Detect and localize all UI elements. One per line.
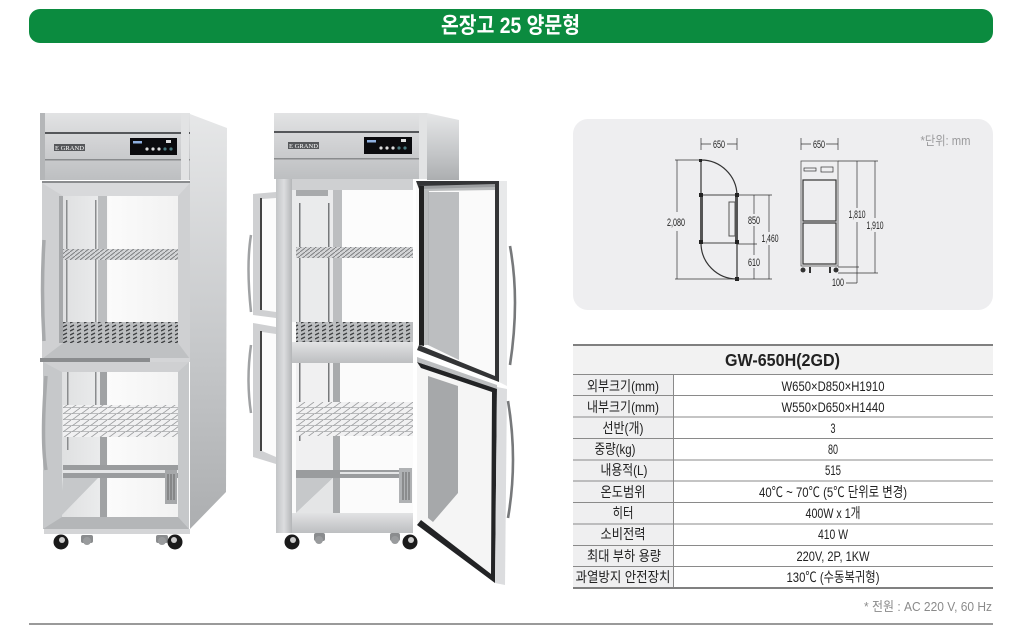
footnote: * 전원 : AC 220 V, 60 Hz xyxy=(864,599,992,614)
upper door xyxy=(42,181,190,359)
row: inner size: 내부크기(mm) xyxy=(587,399,659,415)
row: weight xyxy=(594,441,838,457)
table header xyxy=(573,344,993,374)
row: temperature: 온도범위 xyxy=(600,484,646,500)
left open door lower xyxy=(248,323,276,464)
top control unit: E GRAND xyxy=(55,146,85,152)
spec table xyxy=(573,344,993,589)
title banner xyxy=(29,9,993,43)
top control unit xyxy=(274,113,427,179)
row: power: 410 W xyxy=(818,526,849,542)
row: outer size xyxy=(587,378,885,394)
row: safety device xyxy=(576,569,880,585)
row: weight: 80 xyxy=(828,441,838,457)
top control unit xyxy=(40,113,190,180)
left open door upper xyxy=(248,192,276,318)
side plan drawing: 1,460 xyxy=(762,233,778,245)
row: inner size xyxy=(587,399,885,415)
casters xyxy=(284,533,418,550)
row: weight: 중량(kg) xyxy=(594,441,636,457)
cabinet body xyxy=(276,178,413,533)
unit note: *단위: mm xyxy=(920,134,970,148)
front drawing: 1,910 xyxy=(866,220,884,232)
right open door lower xyxy=(417,357,513,585)
row: heater xyxy=(612,505,860,521)
side plan drawing xyxy=(667,138,778,281)
front drawing xyxy=(800,138,884,289)
front drawing: 1,810 xyxy=(848,209,866,221)
title banner: 온장고 25 양문형 xyxy=(441,13,580,38)
row: outer size: 외부크기(mm) xyxy=(587,378,659,394)
side panel xyxy=(427,113,459,180)
right open door upper xyxy=(416,181,515,386)
row: temperature: 40℃ ~ 70℃ (5℃ 단위로 변경) xyxy=(759,484,907,500)
row: max load: 최대 부하 용량 xyxy=(587,548,661,564)
refrigerator open doors xyxy=(248,113,515,585)
front drawing: 100 xyxy=(832,277,844,289)
row: max load: 220V, 2P, 1KW xyxy=(796,548,870,564)
row: shelves xyxy=(602,420,836,436)
side plan drawing: 610 xyxy=(748,257,760,269)
row: volume xyxy=(600,462,841,478)
row: safety device: 과열방지 안전장치 xyxy=(576,569,670,585)
side panel xyxy=(190,114,227,529)
row: volume: 내용적(L) xyxy=(600,462,648,478)
row: max load xyxy=(587,548,870,564)
panel: dimension drawings xyxy=(573,119,993,310)
side plan drawing: 850 xyxy=(748,215,760,227)
side plan drawing: 650 xyxy=(713,139,725,151)
table header: GW-650H(2GD) xyxy=(725,350,840,370)
row: power: 소비전력 xyxy=(600,526,646,542)
base and casters xyxy=(44,529,190,550)
row: safety device: 130℃ (수동복귀형) xyxy=(786,569,880,585)
side plan drawing: 2,080 xyxy=(667,217,685,229)
row: power xyxy=(600,526,849,542)
row: heater: 400W x 1개 xyxy=(806,505,860,521)
refrigerator closed doors xyxy=(40,113,227,550)
row: outer size: W650×D850×H1910 xyxy=(782,378,885,394)
front drawing: 650 xyxy=(813,139,825,151)
top control unit: E GRAND xyxy=(289,144,319,150)
row: temperature xyxy=(600,484,907,500)
row: heater: 히터 xyxy=(612,505,634,521)
row: volume: 515 xyxy=(825,462,841,478)
row: shelves: 3 xyxy=(830,420,836,436)
lower door xyxy=(40,358,190,529)
row: shelves: 선반(개) xyxy=(602,420,644,436)
label column background xyxy=(573,374,673,588)
row: inner size: W550×D650×H1440 xyxy=(782,399,885,415)
